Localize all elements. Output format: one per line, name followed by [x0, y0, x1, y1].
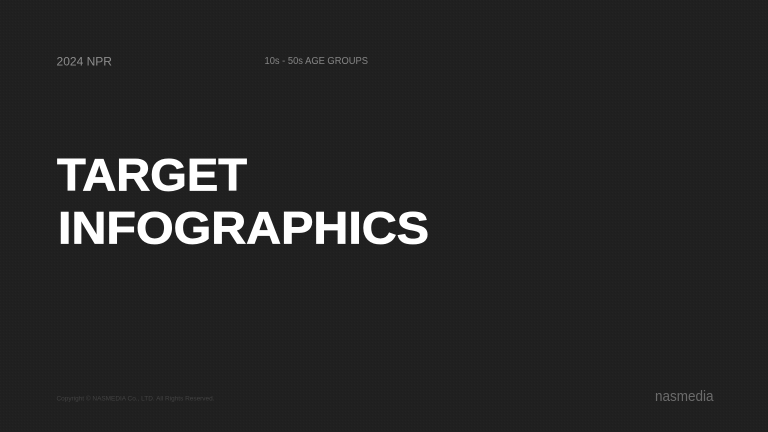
logo: nasmedia: nasmedia — [655, 388, 714, 405]
label: age groups: 10s - 50s AGE GROUPS — [264, 56, 368, 67]
label: 2024 NPR: 2024 NPR — [56, 56, 112, 68]
title: TARGET — [57, 150, 247, 200]
copyright: Copyright © NASMEDIA Co., LTD. All Rights Reserved. — [56, 394, 215, 402]
title — [57, 150, 429, 254]
title: INFOGRAPHICS — [58, 202, 429, 254]
